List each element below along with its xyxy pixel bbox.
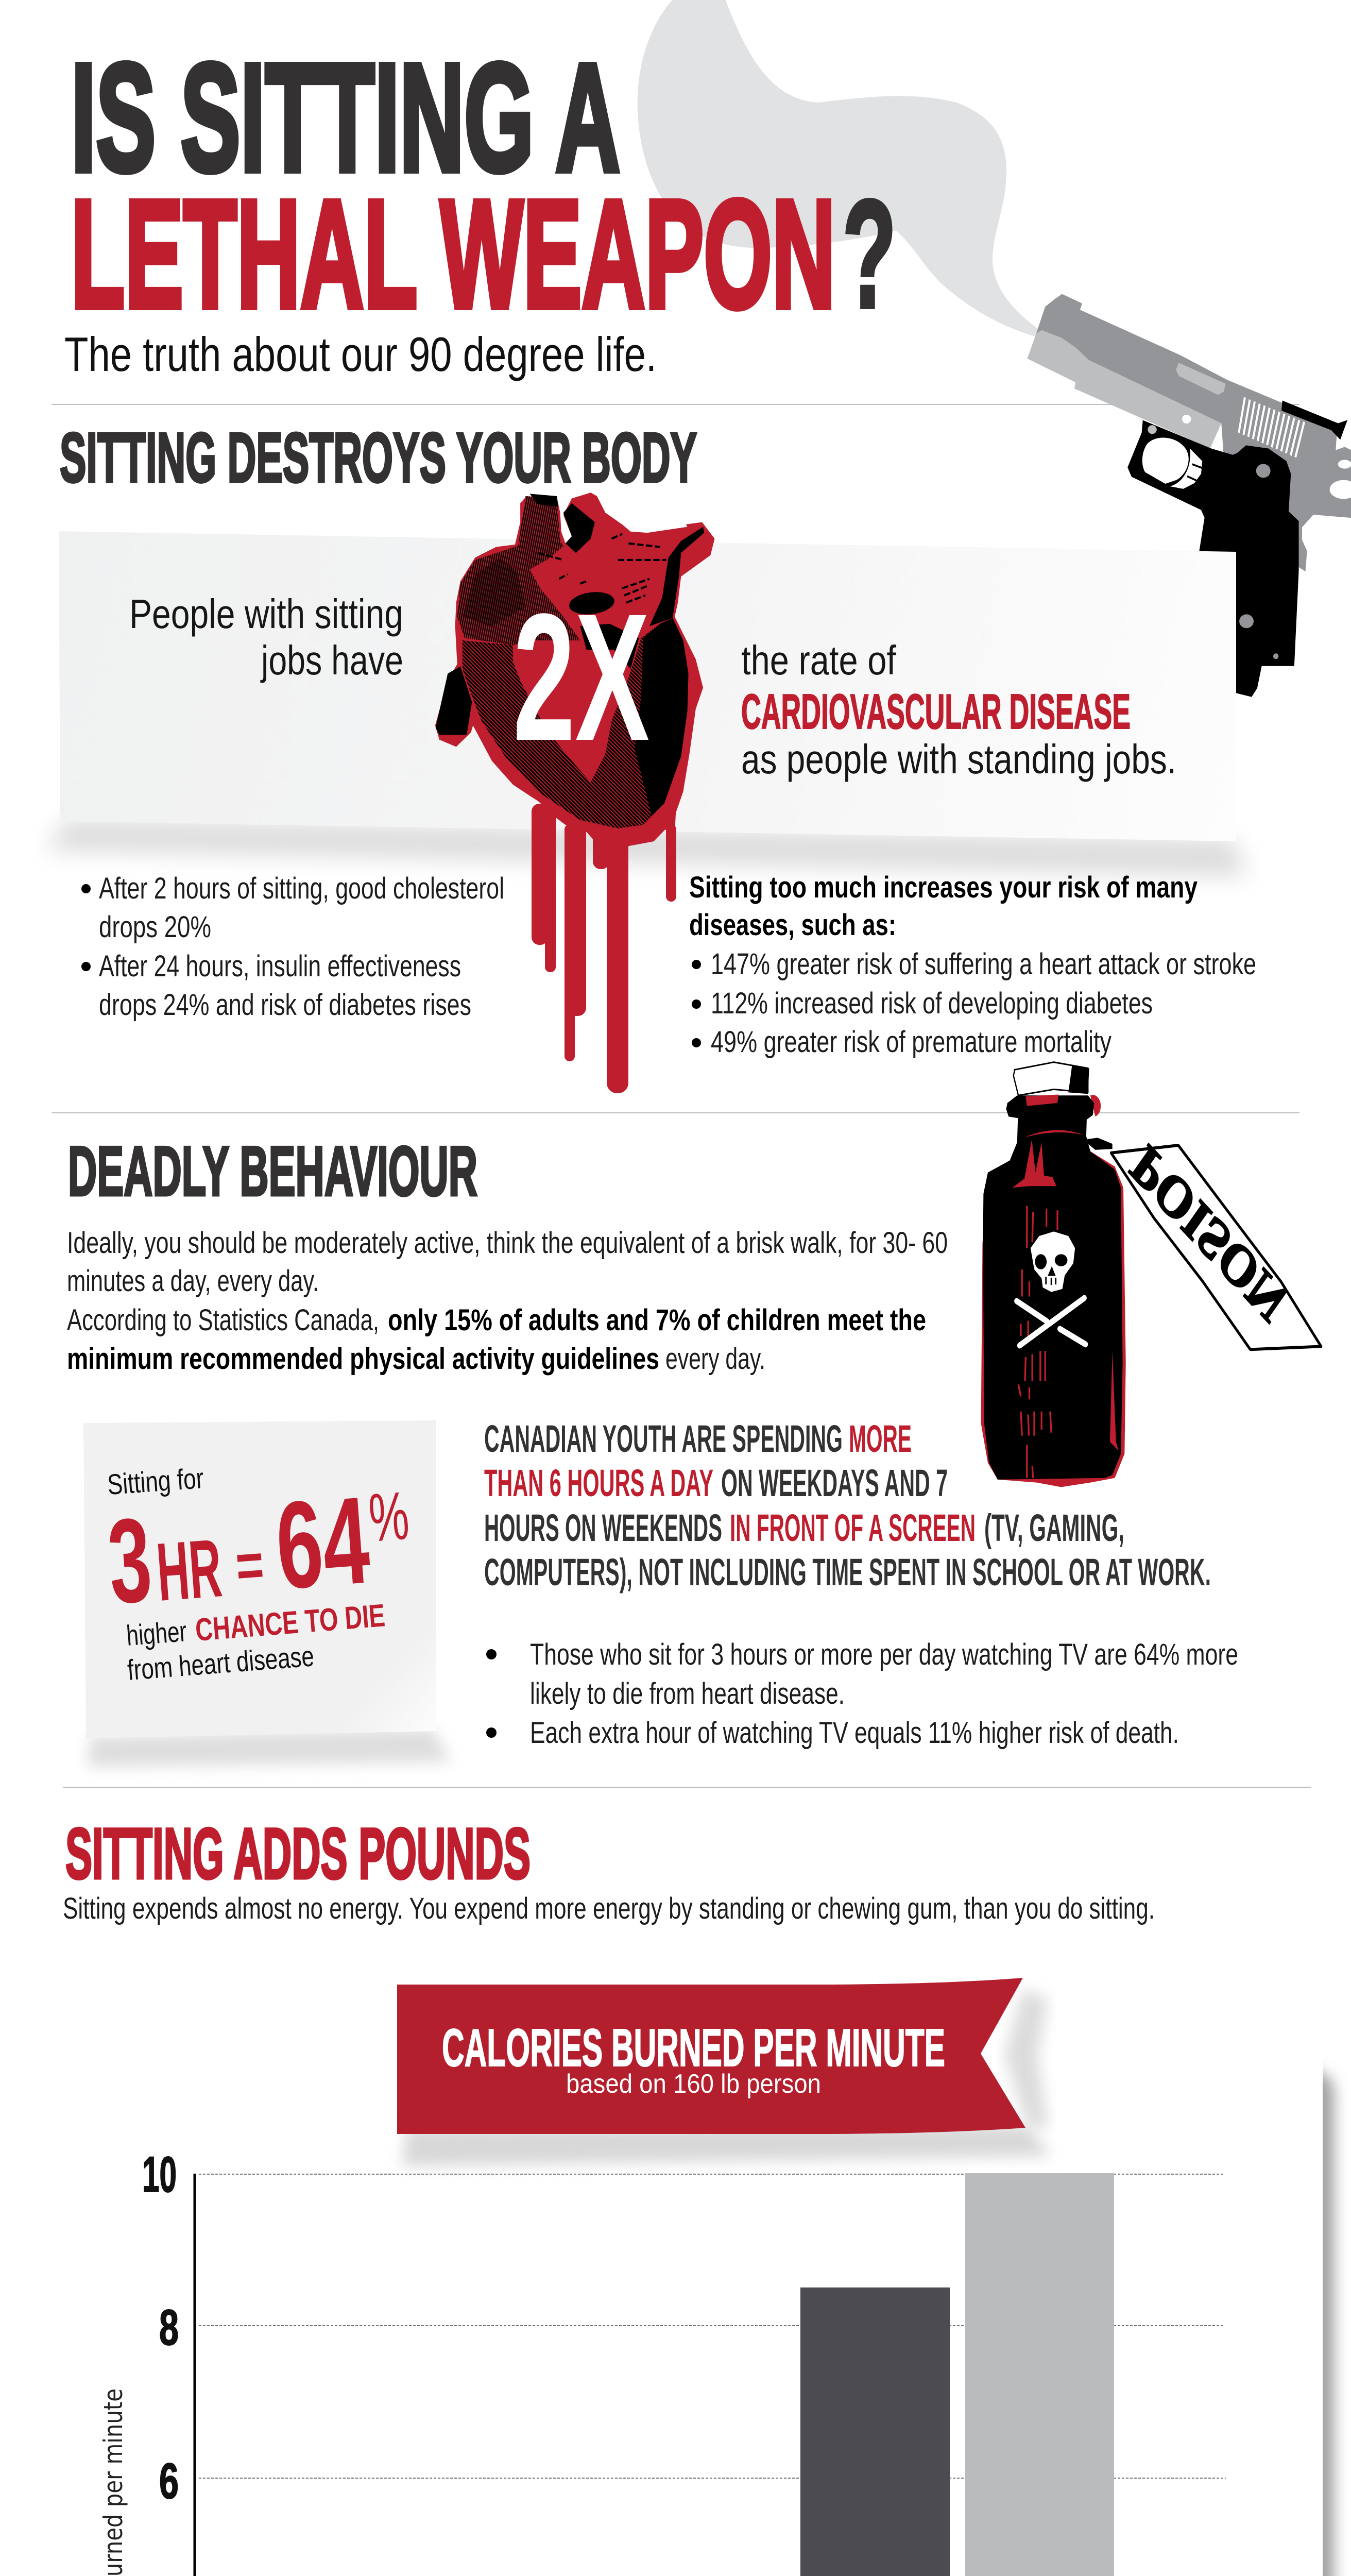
subtitle: The truth about our 90 degree life. [64,327,657,381]
list: cholesterol and insulin effects [81,872,504,1022]
heading: sitting destroys your body: SITTING DESTROYS YOUR BODY [60,418,697,497]
text: higher chance to die: CHANCE TO DIE [194,1598,386,1648]
bar: running [965,2173,1114,2576]
text: sitting for: Sitting for [106,1462,204,1501]
question mark: ? [843,168,896,340]
text: the rate of cardiovascular disease: as people with standing jobs. [741,736,1176,782]
panel: 3 hour note card [83,1420,451,1767]
text: 3hr = 64%: 3 [104,1493,156,1629]
text: canadian youth screen time [484,1417,1211,1594]
heading: sitting adds pounds: SITTING ADDS POUNDS [65,1813,531,1894]
text: 3hr = 64% [104,1470,412,1629]
tag text: POISON [1121,1133,1296,1334]
text: activity guidelines intro: every day. [665,1342,765,1376]
text: activity guidelines intro: Ideally, you should be moderately active, think the equivalent of a brisk walk, for 30- 60 [67,1226,948,1260]
y axis numbers: 8 [159,2299,179,2355]
text: canadian youth screen time: ON WEEKDAYS AND 7 [721,1462,948,1504]
list: cholesterol and insulin effects: After 24 hours, insulin effectiveness [99,950,461,983]
text: activity guidelines intro: According to Statistics Canada, [67,1303,379,1337]
text: the rate of cardiovascular disease: the rate of [741,637,897,683]
ribbon: calories burned per minute [397,1978,1051,2166]
panel: 2X statistic paper [46,531,1246,876]
list: tv watching risks [486,1638,1238,1750]
list: disease risks [689,871,1256,1059]
list: cholesterol and insulin effects: drops 20% [99,910,211,944]
text: people with sitting jobs have: People with sitting [129,591,403,637]
list: disease risks: diseases, such as: [689,908,896,942]
text: activity guidelines intro: only 15% of adults and 7% of children meet the [388,1303,926,1337]
poison tag [1111,1133,1321,1349]
title [71,32,896,340]
ribbon subtitle: based on 160 lb person [566,2069,821,2099]
text: activity guidelines intro [67,1226,948,1376]
text: 3hr = 64%: % [366,1478,412,1556]
list: tv watching risks: likely to die from heart disease. [530,1677,845,1710]
smoke from gun barrel [638,0,1038,337]
y axis numbers: 10 [142,2146,177,2202]
text: 3hr = 64%: HR [153,1521,225,1618]
icon: poison bottle [981,1062,1321,1487]
text: canadian youth screen time: (TV, GAMING, [984,1506,1124,1549]
text: canadian youth screen time: MORE [849,1417,912,1460]
list: disease risks: 112% increased risk of developing diabetes [711,987,1153,1020]
text: people with sitting jobs have: jobs have [260,637,403,683]
text: canadian youth screen time: CANADIAN YOUTH ARE SPENDING [484,1417,843,1460]
icon: pistol [1027,294,1351,697]
bar: ice skating [800,2287,950,2576]
text: 3hr = 64%: 64 [271,1470,373,1615]
text: people with sitting jobs have [129,591,403,683]
text: activity guidelines intro: minimum recommended physical activity guidelines [67,1342,659,1376]
list: cholesterol and insulin effects: After 2 hours of sitting, good cholesterol [99,872,504,905]
text: canadian youth screen time: THAN 6 HOURS A DAY [484,1462,713,1504]
y axis numbers: 6 [159,2453,179,2509]
list: disease risks: Sitting too much increases your risk of many [689,871,1198,904]
icon: blood drips [532,804,676,1093]
text: 2X: 2X [513,575,650,778]
text: higher chance to die [125,1598,386,1686]
list: cholesterol and insulin effects: drops 24% and risk of diabetes rises [99,988,471,1022]
text: the rate of cardiovascular disease [741,637,1176,782]
text: higher chance to die: higher [125,1615,188,1652]
text: canadian youth screen time: IN FRONT OF A SCREEN [730,1506,976,1549]
text: canadian youth screen time: HOURS ON WEEKENDS [484,1506,722,1549]
heading: deadly behaviour: DEADLY BEHAVIOUR [68,1132,477,1210]
title line one: IS SITTING A [71,32,620,204]
y axis numbers [142,2146,179,2576]
list: disease risks: 49% greater risk of premature mortality [711,1025,1111,1059]
panel: bar chart card [43,2045,1334,2576]
bar chart [98,2146,1226,2576]
text: 3hr = 64%: = [233,1530,266,1601]
ribbon title: CALORIES BURNED PER MINUTE [442,2018,945,2077]
axes [195,2174,1225,2576]
text: higher chance to die: from heart disease [126,1639,315,1686]
icon: anatomical heart [435,493,715,846]
text: activity guidelines intro: minutes a day, every day. [67,1264,319,1298]
